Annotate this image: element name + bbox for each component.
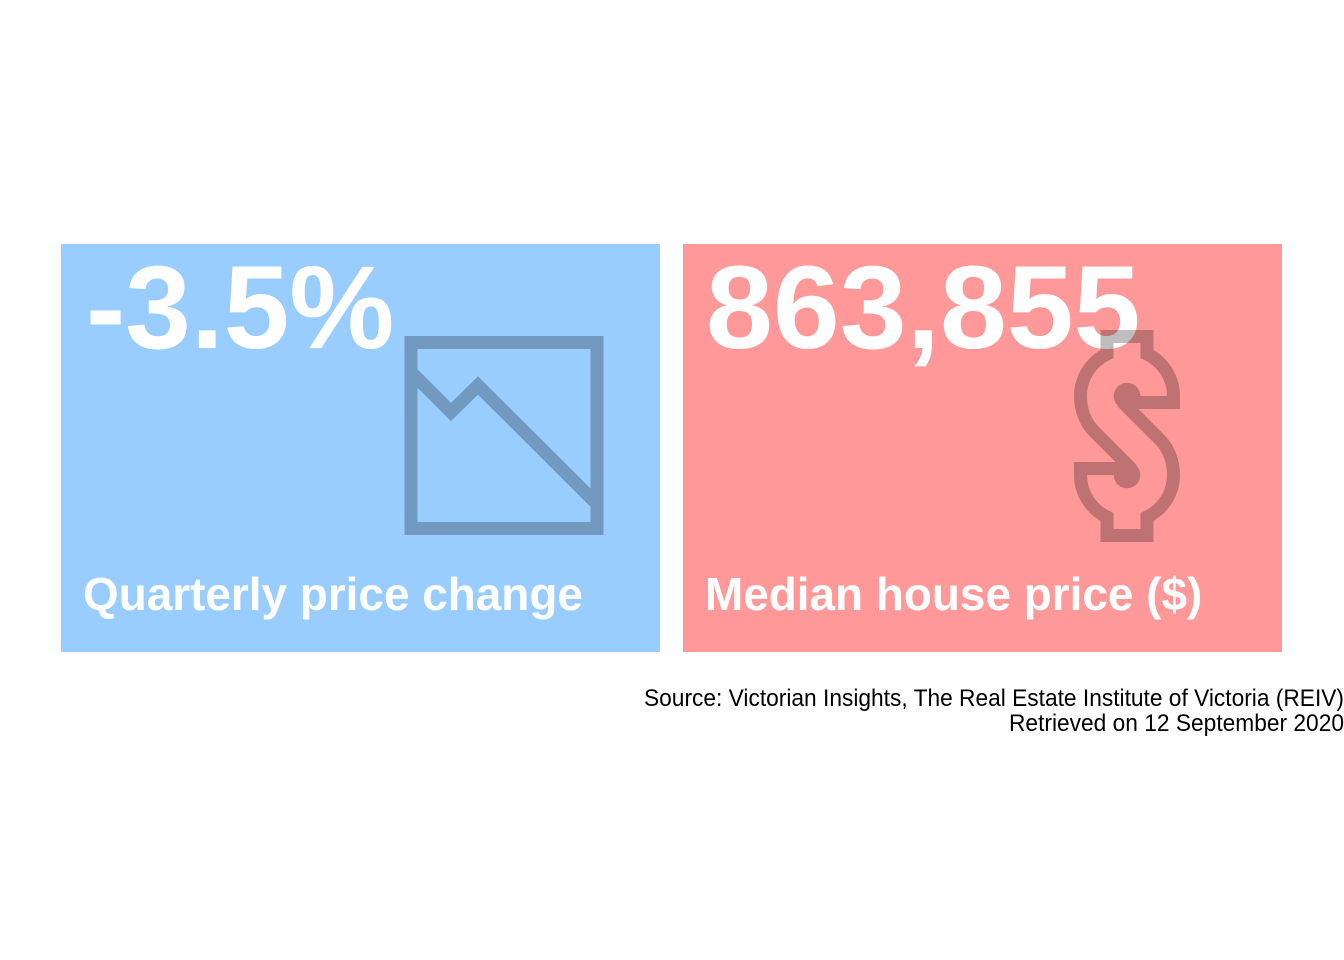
source note: [644, 685, 1344, 737]
icon: falling line chart: [411, 342, 597, 528]
value: median price: 863,855: [706, 242, 1140, 374]
icon: dollar sign: [1080, 336, 1174, 536]
value: quarterly change: -3.5%: [86, 242, 394, 374]
panel: quarterly price change: [61, 242, 660, 652]
panel: median house price: [683, 242, 1282, 652]
label: median house price: Median house price ($): [705, 568, 1202, 620]
label: quarterly price change: Quarterly price change: [83, 568, 583, 620]
